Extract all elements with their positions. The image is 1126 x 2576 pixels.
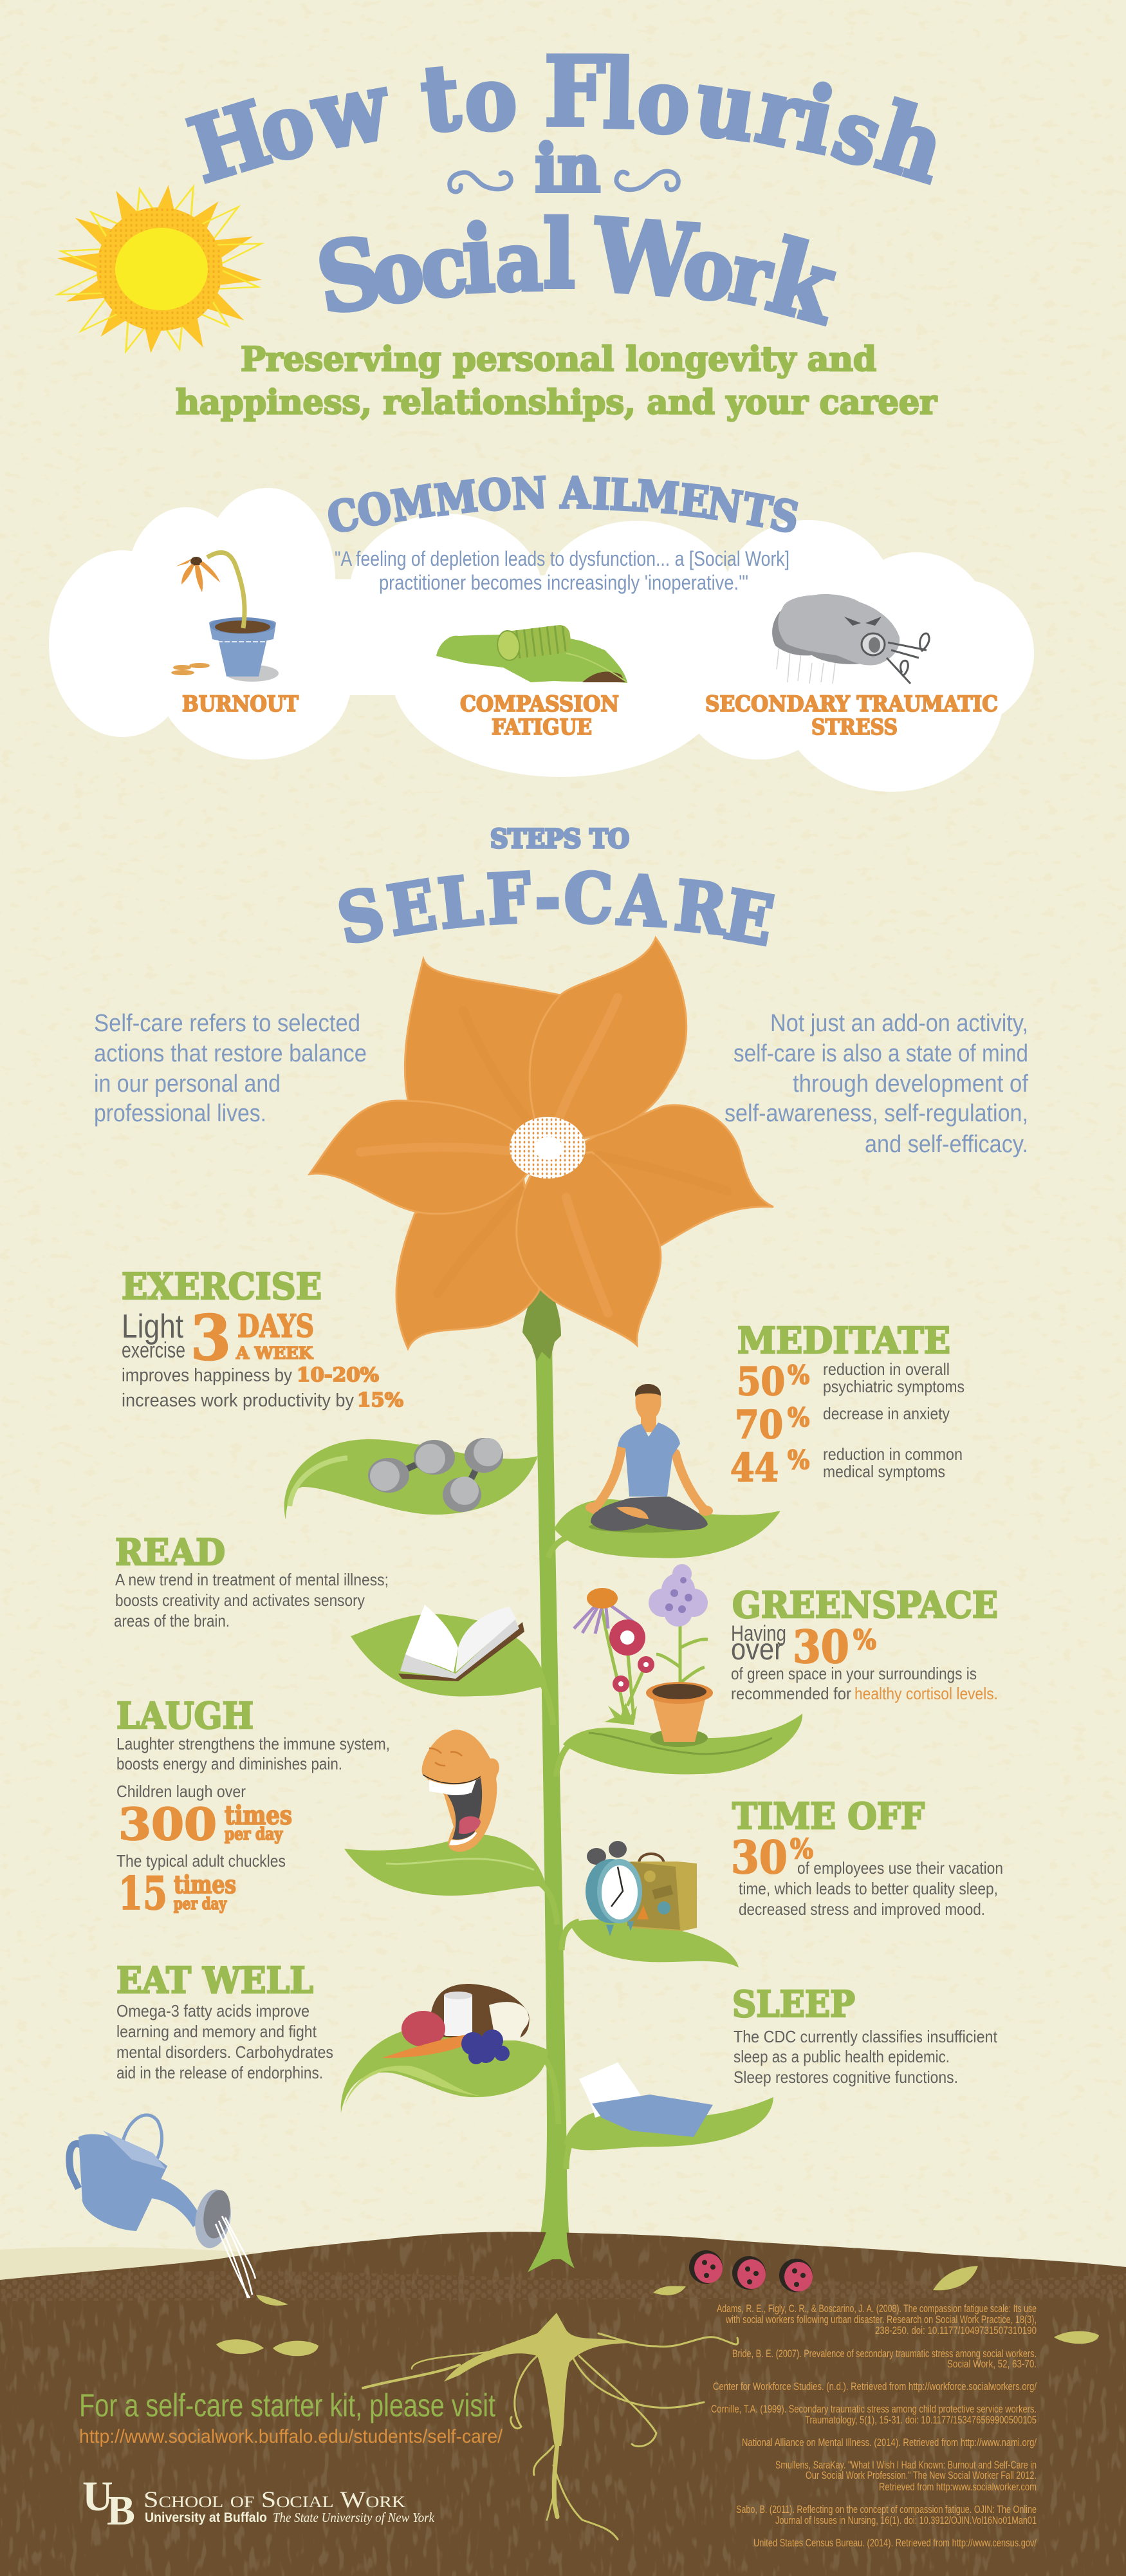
subtitle: Preserving personal longevity and <box>241 340 876 379</box>
text: meditate: reduction in common <box>823 1444 963 1464</box>
text: eat well <box>116 1959 333 2082</box>
stem base <box>528 2208 575 2272</box>
leaf: eat well <box>341 2028 558 2124</box>
text: self-care definition: Self-care refers to selected <box>94 1010 360 1037</box>
text: sleep: sleep as a public health epidemic. <box>734 2047 950 2066</box>
text: greenspace: over <box>731 1632 783 1666</box>
text: laugh: times <box>174 1870 236 1899</box>
labels: ailments: COMPASSION <box>460 691 619 717</box>
text: exercise: 3 <box>190 1302 231 1374</box>
text: greenspace: recommended for <box>731 1684 851 1703</box>
text: sleep <box>732 1983 998 2087</box>
text: read: boosts creativity and activates sensory <box>115 1591 365 1610</box>
title line: Social Work: r <box>723 225 780 325</box>
labels: ailments: SECONDARY TRAUMATIC <box>705 691 998 717</box>
text: time off: 30 <box>731 1831 788 1884</box>
text: sleep: The CDC currently classifies insufficient <box>734 2027 998 2046</box>
logo: UB School of Social Work: The State University of New York <box>273 2510 435 2525</box>
text: exercise <box>122 1265 403 1412</box>
text: exercise: EXERCISE <box>122 1265 322 1308</box>
text: state of mind: Not just an add-on activity, <box>770 1010 1028 1037</box>
text: state of mind: self-awareness, self-regulation, <box>725 1100 1028 1127</box>
icon: pillow and blanket <box>579 2062 713 2137</box>
text: read: READ <box>115 1531 225 1574</box>
logo: UB School of Social Work: UB <box>82 2473 135 2534</box>
text: greenspace <box>731 1584 998 1703</box>
quote <box>335 547 789 594</box>
icon: eaten leaf with caterpillar <box>436 623 627 683</box>
references: National Alliance on Mental Illness. (2014). Retrieved from http://www.nami.org/ <box>742 2436 1037 2449</box>
call to action: http://www.socialwork.buffalo.edu/students/self-care/ <box>79 2426 503 2447</box>
icon: laughing face <box>422 1730 499 1852</box>
text: state of mind: through development of <box>793 1070 1028 1097</box>
icon: roots <box>363 2313 738 2539</box>
sepal <box>522 1278 561 1361</box>
text: meditate: medical symptoms <box>823 1462 945 1481</box>
text: meditate: 50 <box>737 1359 785 1405</box>
labels: ailments: STRESS <box>811 714 898 740</box>
text: state of mind: self-care is also a state of mind <box>734 1040 1028 1067</box>
references: Traumatology, 5(1), 15-31. doi: 10.1177/153476569900500105 <box>805 2414 1037 2426</box>
text: meditate: MEDITATE <box>737 1320 950 1362</box>
references: Journal of Issues in Nursing, 16(1). doi: 10.3912/OJIN.Vol16No01Man01 <box>775 2514 1037 2526</box>
icon: dumbbells <box>368 1438 503 1512</box>
stem <box>528 1339 575 2272</box>
text: sleep: Sleep restores cognitive functions. <box>734 2067 958 2087</box>
subtitle: happiness, relationships, and your career <box>176 383 937 422</box>
icon: flowers and pot <box>574 1564 713 1747</box>
title line: How to Flourish: l <box>602 39 636 150</box>
text: exercise: 10-20% <box>297 1364 379 1386</box>
logo: UB School of Social Work: School of Social Work <box>143 2487 405 2512</box>
text: laugh <box>116 1695 390 1920</box>
text: laugh: per day <box>225 1825 283 1844</box>
title line: How to Flourish: w <box>304 51 398 172</box>
heading: common ailments: COMMON AILMENTS <box>323 467 803 544</box>
title line: How to Flourish: o <box>250 71 323 182</box>
text: eat well: EAT WELL <box>116 1959 313 2002</box>
title line: Social Work: c <box>416 215 471 317</box>
icon: fallen leaves <box>216 2266 1099 2356</box>
text: laugh: The typical adult chuckles <box>116 1851 286 1871</box>
title line: How to Flourish: H <box>178 80 281 203</box>
references: Social Work, 52, 63-70. <box>947 2358 1037 2370</box>
labels: ailments <box>182 691 998 740</box>
title line: Social Work: o <box>678 217 740 321</box>
text: self-care definition: actions that restore balance <box>94 1040 367 1067</box>
icon: storm cloud <box>772 594 929 684</box>
text: meditate: psychiatric symptoms <box>823 1377 964 1396</box>
text: eat well: Omega-3 fatty acids improve <box>116 2001 309 2021</box>
text: greenspace: GREENSPACE <box>732 1584 998 1627</box>
leaf: exercise <box>284 1439 538 1520</box>
leaf: read <box>351 1614 553 1725</box>
text: laugh: 15 <box>118 1867 167 1920</box>
text: eat well: aid in the release of endorphins. <box>116 2063 323 2082</box>
icon: sun <box>38 163 281 375</box>
heading: self-care: SELF-CARE <box>331 857 779 961</box>
leaf: greenspace <box>556 1713 802 1777</box>
leaf: meditate <box>548 1499 780 1558</box>
text: meditate: 70 <box>735 1403 783 1448</box>
text: meditate: reduction in overall <box>823 1359 950 1379</box>
title word: in: in <box>535 130 600 207</box>
text: greenspace: Having <box>731 1621 786 1646</box>
references: Center for Workforce Studies. (n.d.). Retrieved from http://workforce.socialworkers.org/ <box>713 2380 1037 2393</box>
text: self-care definition <box>94 1010 367 1127</box>
text: meditate: % <box>788 1445 809 1475</box>
title line: How to Flourish: r <box>748 58 813 170</box>
text: self-care definition: in our personal and <box>94 1070 281 1097</box>
subtitle <box>176 340 937 422</box>
flourish ornaments <box>450 171 678 192</box>
quote: "A feeling of depletion leads to dysfunction... a [Social Work] <box>335 547 789 570</box>
leaf: sleep <box>564 2097 773 2169</box>
references: Retrieved from http:www.socialworker.com <box>879 2481 1037 2493</box>
title line: Social Work: l <box>543 200 575 310</box>
title line: Social Work: o <box>367 219 429 324</box>
labels: ailments: BURNOUT <box>182 691 299 717</box>
text: eat well: mental disorders. Carbohydrates <box>116 2042 333 2062</box>
title <box>178 35 956 348</box>
title line: Social Work: a <box>495 215 543 310</box>
title line: Social Work: k <box>757 217 849 348</box>
title line: How to Flourish: o <box>463 47 518 151</box>
text: meditate <box>730 1320 964 1491</box>
text: read <box>114 1531 389 1630</box>
icon: watering can <box>69 2115 255 2298</box>
text: laugh: Laughter strengthens the immune system, <box>116 1734 390 1753</box>
quote: practitioner becomes increasingly 'inoperative.'" <box>379 571 748 594</box>
call to action: For a self-care starter kit, please visit <box>79 2387 495 2423</box>
title line: How to Flourish: i <box>791 66 843 175</box>
title line: Social Work: S <box>309 216 388 336</box>
icon: wilted plant in pot <box>171 552 279 682</box>
icon: alarm clock and suitcase <box>586 1841 697 1936</box>
title line: Social Work: i <box>460 205 497 314</box>
ground shadow <box>0 2247 257 2291</box>
title line: How to Flourish: o <box>635 50 692 154</box>
text: exercise: A WEEK <box>235 1344 314 1363</box>
text: exercise: Light <box>122 1308 183 1345</box>
icon: meditating person <box>586 1384 713 1533</box>
references: Our Social Work Profession." The New Social Worker Fall 2012. <box>806 2469 1037 2481</box>
text: time off: decreased stress and improved mood. <box>739 1899 985 1919</box>
text: meditate: decrease in anxiety <box>823 1404 950 1423</box>
references: 238-250. doi: 10.1177/1049731507310190 <box>875 2324 1037 2337</box>
references: United States Census Bureau. (2014). Retrieved from http://www.census.gov/ <box>753 2537 1037 2549</box>
text: exercise: exercise <box>122 1338 185 1363</box>
title line: How to Flourish: F <box>544 35 605 147</box>
text: state of mind <box>725 1010 1028 1158</box>
text: exercise: 15% <box>357 1389 403 1412</box>
references: Smullens, SaraKay. "What I Wish I Had Known: Burnout and Self-Care in <box>775 2459 1037 2471</box>
text: time off: TIME OFF <box>732 1795 925 1838</box>
text: self-care definition: professional lives. <box>94 1100 266 1127</box>
title line: How to Flourish: s <box>822 80 893 187</box>
text: eat well: learning and memory and fight <box>116 2022 317 2041</box>
text: laugh: 300 <box>118 1799 217 1851</box>
title line: How to Flourish: h <box>866 82 956 205</box>
text: greenspace: 30 <box>793 1620 849 1674</box>
text: time off: % <box>790 1833 813 1865</box>
call to action <box>79 2387 503 2447</box>
text: time off <box>731 1795 1003 1919</box>
ground <box>0 2227 1126 2576</box>
leaf: laugh <box>344 1834 557 1925</box>
text: state of mind: and self-efficacy. <box>865 1131 1028 1158</box>
icon: ladybugs <box>689 2250 813 2292</box>
text: laugh: times <box>225 1800 292 1831</box>
title line: How to Flourish: u <box>689 50 762 162</box>
text: greenspace: of green space in your surroundings is <box>731 1664 977 1683</box>
leaf: time off <box>562 1919 739 1968</box>
panel: common ailments cloud <box>49 488 1034 792</box>
flower <box>309 938 773 1349</box>
text: laugh: boosts energy and diminishes pain. <box>116 1754 342 1773</box>
text: exercise: increases work productivity by <box>122 1390 354 1411</box>
text: exercise: improves happiness by <box>122 1365 292 1386</box>
logo: UB School of Social Work: University at Buffalo <box>145 2510 267 2525</box>
text: meditate: % <box>788 1360 809 1390</box>
text: read: A new trend in treatment of mental illness; <box>115 1570 389 1589</box>
text: exercise: DAYS <box>237 1307 314 1345</box>
references <box>711 2302 1037 2549</box>
text: time off: of employees use their vacation <box>797 1858 1003 1878</box>
text: meditate: % <box>788 1403 809 1433</box>
text: meditate: 44 <box>730 1446 779 1491</box>
icon: open book <box>398 1605 524 1681</box>
text: greenspace: % <box>853 1624 876 1656</box>
text: read: areas of the brain. <box>114 1611 230 1630</box>
icon: healthy food <box>382 1984 530 2064</box>
text: laugh: per day <box>174 1894 227 1913</box>
labels: ailments: FATIGUE <box>492 714 592 740</box>
text: sleep: SLEEP <box>732 1983 855 2026</box>
text: laugh: Children laugh over <box>116 1782 246 1801</box>
flower centre <box>510 1117 586 1179</box>
title line: Social Work: W <box>589 196 701 321</box>
heading: steps to: STEPS TO <box>490 824 629 854</box>
logo: UB School of Social Work <box>82 2473 435 2534</box>
text: laugh: LAUGH <box>116 1695 254 1737</box>
title line: How to Flourish: t <box>418 44 464 153</box>
text: time off: time, which leads to better quality sleep, <box>739 1879 998 1898</box>
text: greenspace: healthy cortisol levels. <box>854 1684 998 1703</box>
